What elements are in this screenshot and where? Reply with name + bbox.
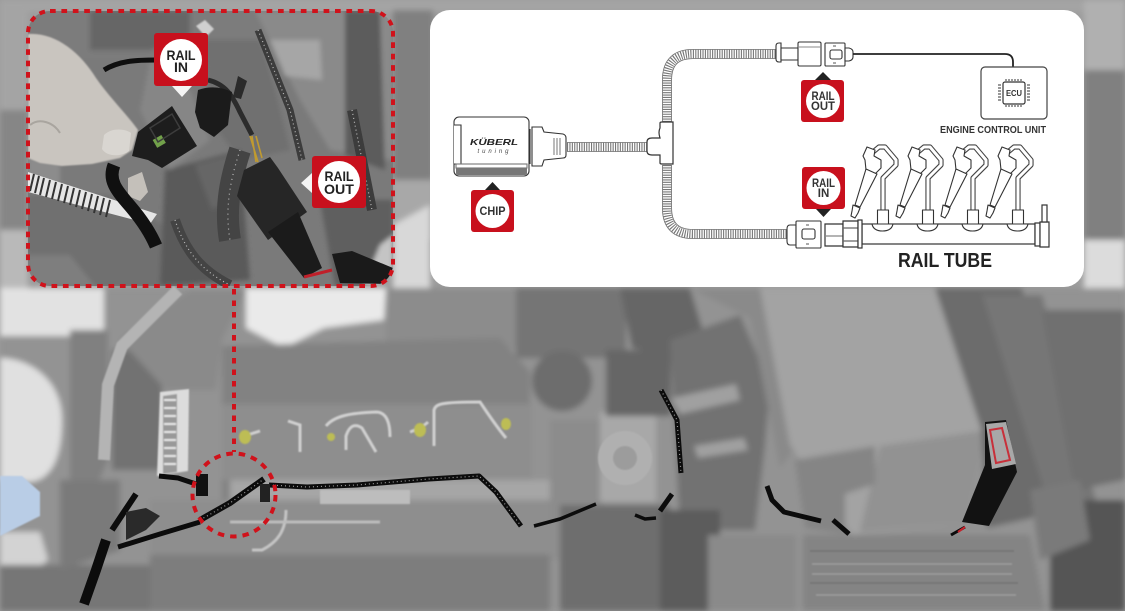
connector: rail in: [787, 221, 821, 248]
label: rail tube: RAIL TUBE: [898, 249, 992, 272]
intake: [670, 315, 770, 530]
male connector plug: [195, 87, 232, 137]
finger tip: [128, 172, 148, 201]
air box: [760, 288, 990, 535]
lower base: [0, 288, 1125, 611]
badge: rail out (photo): [301, 156, 366, 208]
badge: chip: [471, 182, 514, 232]
badge: rail in (photo): IN: [174, 59, 188, 75]
badge: rail in (photo): [154, 33, 208, 97]
badge: rail in (photo): RAIL: [166, 47, 196, 63]
engine right side: [532, 351, 592, 411]
white pipe fitting: [196, 20, 214, 37]
barcode label: [28, 172, 157, 224]
badge: rail out (photo): OUT: [324, 181, 354, 197]
badge: rail in: [802, 167, 845, 217]
rail out connector: [237, 157, 307, 240]
ECU box: [981, 67, 1047, 119]
ECU box: ECU: [1006, 89, 1022, 98]
connectors: rail out: [776, 42, 853, 66]
rail highlight: [320, 490, 410, 504]
badge: rail out (photo): RAIL: [324, 168, 354, 184]
badge: rail out: RAIL: [812, 91, 834, 103]
chip module: tuning: [478, 149, 509, 155]
dashed circle highlight: [192, 454, 276, 536]
badge: rail out: [801, 72, 844, 122]
engine label: [157, 389, 189, 476]
lower metal pipe: [252, 510, 286, 550]
metal pipe: [104, 290, 178, 460]
top area: [0, 0, 1125, 12]
tuning chip installed on air box: [962, 420, 1017, 526]
throttle detail: [598, 431, 652, 485]
chip module: [454, 117, 566, 176]
bottom cover: [708, 535, 796, 611]
injector pipes: [244, 402, 506, 452]
harness speckle: [200, 390, 681, 526]
black wire top: [104, 60, 156, 70]
engine block: [222, 338, 530, 500]
dashed frame: [28, 11, 393, 286]
panel: wiring diagram: [430, 10, 1084, 287]
panel: connector close-up photo: [28, 11, 393, 286]
blue cap: [0, 476, 40, 536]
bottom cover ribs: [812, 564, 1016, 595]
badge: rail in: RAIL: [812, 178, 835, 190]
dashed leader line: [232, 289, 236, 452]
harness connector: [126, 508, 160, 540]
right dark parts: [935, 288, 1072, 528]
corrugated hoses: [175, 30, 372, 285]
ECU wire: [853, 54, 1013, 67]
reservoir: [0, 358, 62, 482]
hand: [28, 34, 138, 166]
chip module: KÜBERL: [470, 137, 518, 147]
badge: rail in: IN: [818, 188, 829, 200]
badge: rail out: OUT: [811, 101, 835, 113]
held connector: [132, 106, 197, 168]
wiring harness on the engine: [84, 390, 965, 604]
badge: chip: CHIP: [480, 206, 506, 218]
rail tube: [825, 205, 1049, 248]
injectors: [851, 147, 1031, 231]
cable: braided loom: [567, 54, 788, 234]
label: engine control unit: ENGINE CONTROL UNIT: [940, 124, 1047, 136]
corrugated wire: [112, 165, 156, 246]
T junction: [647, 122, 673, 164]
yellow wires: [250, 136, 262, 162]
